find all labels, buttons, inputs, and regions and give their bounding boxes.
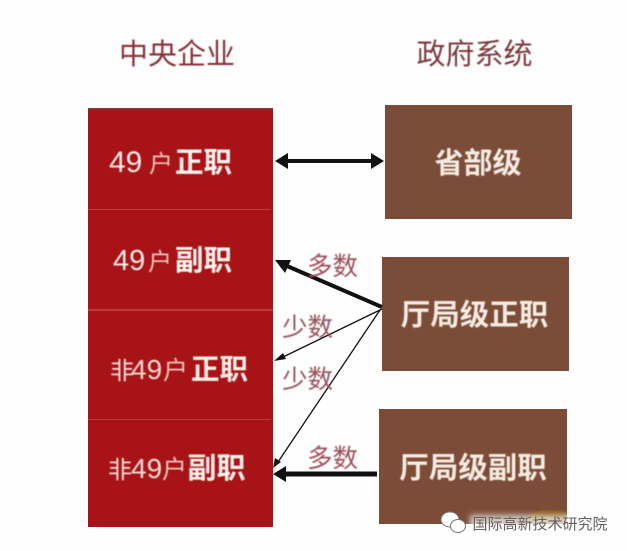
panel: 厅局级副职 (379, 409, 567, 524)
tier label: 非49户副职: 49 (131, 453, 162, 484)
panel: 厅局级副职: 厅局级副职 (399, 452, 547, 485)
arrow: minority to 非49户正职 (274, 309, 382, 361)
arrow: majority to 49户副职 (275, 260, 382, 307)
arrow: 49户正职 to 省部级 (275, 153, 384, 169)
tier label: 非49户副职: 副职 (188, 453, 246, 485)
watermark: wechat account (441, 512, 610, 533)
tier label: 非49户正职: 正职 (191, 354, 248, 386)
tier label: 49户副职: 户 (148, 249, 172, 276)
panel: 省部级 (385, 105, 572, 219)
tier label: 非49户正职: 49 (131, 354, 162, 385)
tier label: 49户副职: 副职 (175, 245, 232, 277)
tier label: 非49户正职: 户 (163, 357, 188, 385)
tier label: 非49户正职: 非 (110, 358, 134, 385)
title: central enterprises: 中央企业 (119, 38, 235, 71)
panel: 厅局级正职: 厅局级正职 (401, 299, 548, 332)
tier label: 49户副职: 49 (113, 245, 145, 277)
tier label: 49户正职: 49 (109, 146, 142, 179)
label: 多数 lower: 多数 (307, 445, 358, 473)
title: government system: 政府系统 (416, 38, 533, 71)
panel: 厅局级正职 (382, 257, 569, 371)
tier label: 49户正职: 户 (149, 151, 173, 178)
watermark: wechat account: 国际高新技术研究院 (472, 515, 608, 533)
tier label: 49户正职: 正职 (175, 147, 232, 179)
tier label: 非49户副职: 户 (162, 456, 187, 484)
label: 少数 lower: 少数 (282, 366, 333, 394)
label: 少数 upper: 少数 (282, 314, 333, 342)
arrow: majority to 非49户副职 (273, 466, 377, 482)
arrow: minority to 非49户副职 (273, 310, 380, 468)
panel: 省部级: 省部级 (434, 147, 522, 180)
label: 多数 upper: 多数 (307, 253, 358, 281)
icon: wechat bubbles (441, 512, 466, 532)
panel: central enterprise tiers (88, 108, 273, 527)
tier label: 非49户副职: 非 (108, 457, 132, 484)
